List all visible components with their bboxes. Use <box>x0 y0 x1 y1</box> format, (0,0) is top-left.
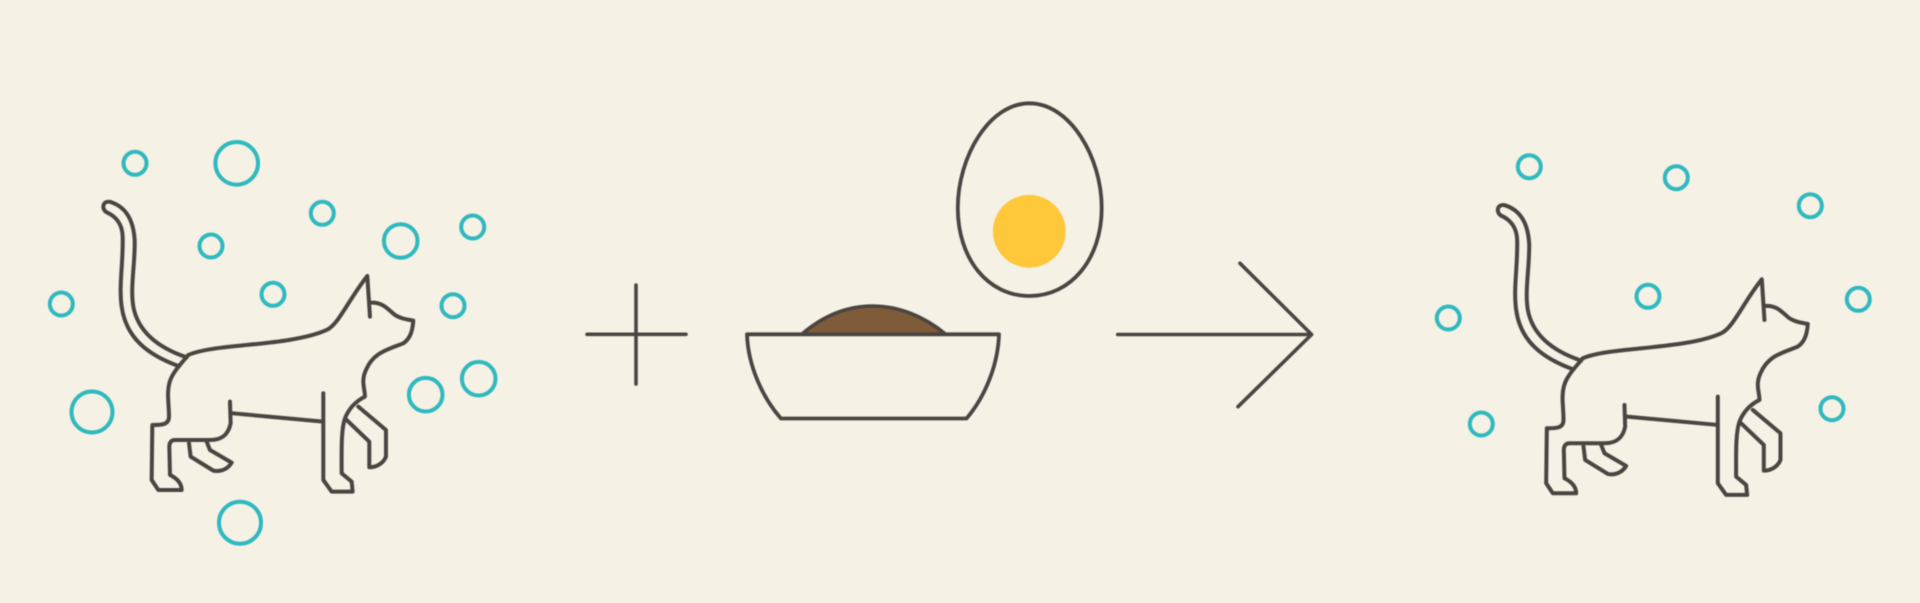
arrow <box>1118 263 1312 407</box>
icon: cat, right <box>1498 205 1808 495</box>
icon: bowl <box>747 334 999 418</box>
icon: plus sign <box>587 285 686 384</box>
icon: allergen particles, few <box>1437 155 1870 435</box>
icon: allergen particles, many <box>50 142 496 544</box>
icon: egg yolk <box>993 195 1066 268</box>
icon: cat, left <box>103 202 413 492</box>
icon: food mound <box>802 306 946 334</box>
icon: egg <box>958 103 1102 296</box>
